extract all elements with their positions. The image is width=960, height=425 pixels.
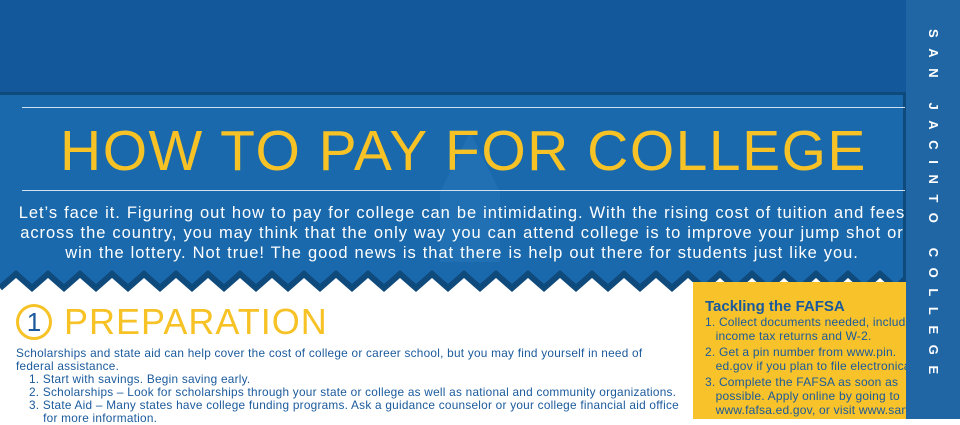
hero panel [0, 92, 906, 292]
title: HOW TO PAY FOR COLLEGE [60, 119, 867, 183]
intro text [19, 204, 905, 262]
fafsa list: 2. Get a pin number from www.pin. [705, 345, 896, 359]
intro text: win the lottery. Not true! The good news is that there is help out there for students just like you. [65, 244, 859, 262]
title [22, 107, 905, 191]
header band [0, 0, 960, 92]
panel: tackling the FAFSA [693, 282, 906, 419]
preparation text [16, 346, 679, 425]
panel: preparation [16, 301, 679, 425]
preparation text: 1. Start with savings. Begin saving early. [29, 372, 250, 386]
fafsa heading: Tackling the FAFSA [705, 298, 845, 315]
fafsa list [705, 315, 906, 419]
preparation text: 3. State Aid – Many states have college funding programs. Ask a guidance counselor or your college financial aid office [29, 398, 679, 412]
preparation text: Scholarships and state aid can help cover the cost of college or career school, but you may find yourself in need of [16, 346, 642, 360]
intro text: Let’s face it. Figuring out how to pay for college can be intimidating. With the rising cost of tuition and fees [19, 204, 905, 222]
fafsa list: 3. Complete the FAFSA as soon as [705, 375, 898, 389]
fafsa list: possible. Apply online by going to [716, 389, 900, 403]
preparation text: federal assistance. [16, 359, 119, 373]
heading: preparation: 1 [27, 307, 41, 337]
preparation text: 2. Scholarships – Look for scholarships through your state or college as well as national and community organizations. [29, 385, 676, 399]
sidebar: San Jacinto College [906, 0, 960, 419]
intro text: across the country, you may think that the only way you can attend college is to improve your jump shot or [20, 224, 904, 242]
sidebar text: SAN JACINTO COLLEGE [926, 29, 941, 385]
preparation text: for more information. [43, 411, 157, 425]
fafsa list: income tax returns and W-2. [716, 329, 872, 343]
heading: preparation: PREPARATION [64, 301, 328, 342]
